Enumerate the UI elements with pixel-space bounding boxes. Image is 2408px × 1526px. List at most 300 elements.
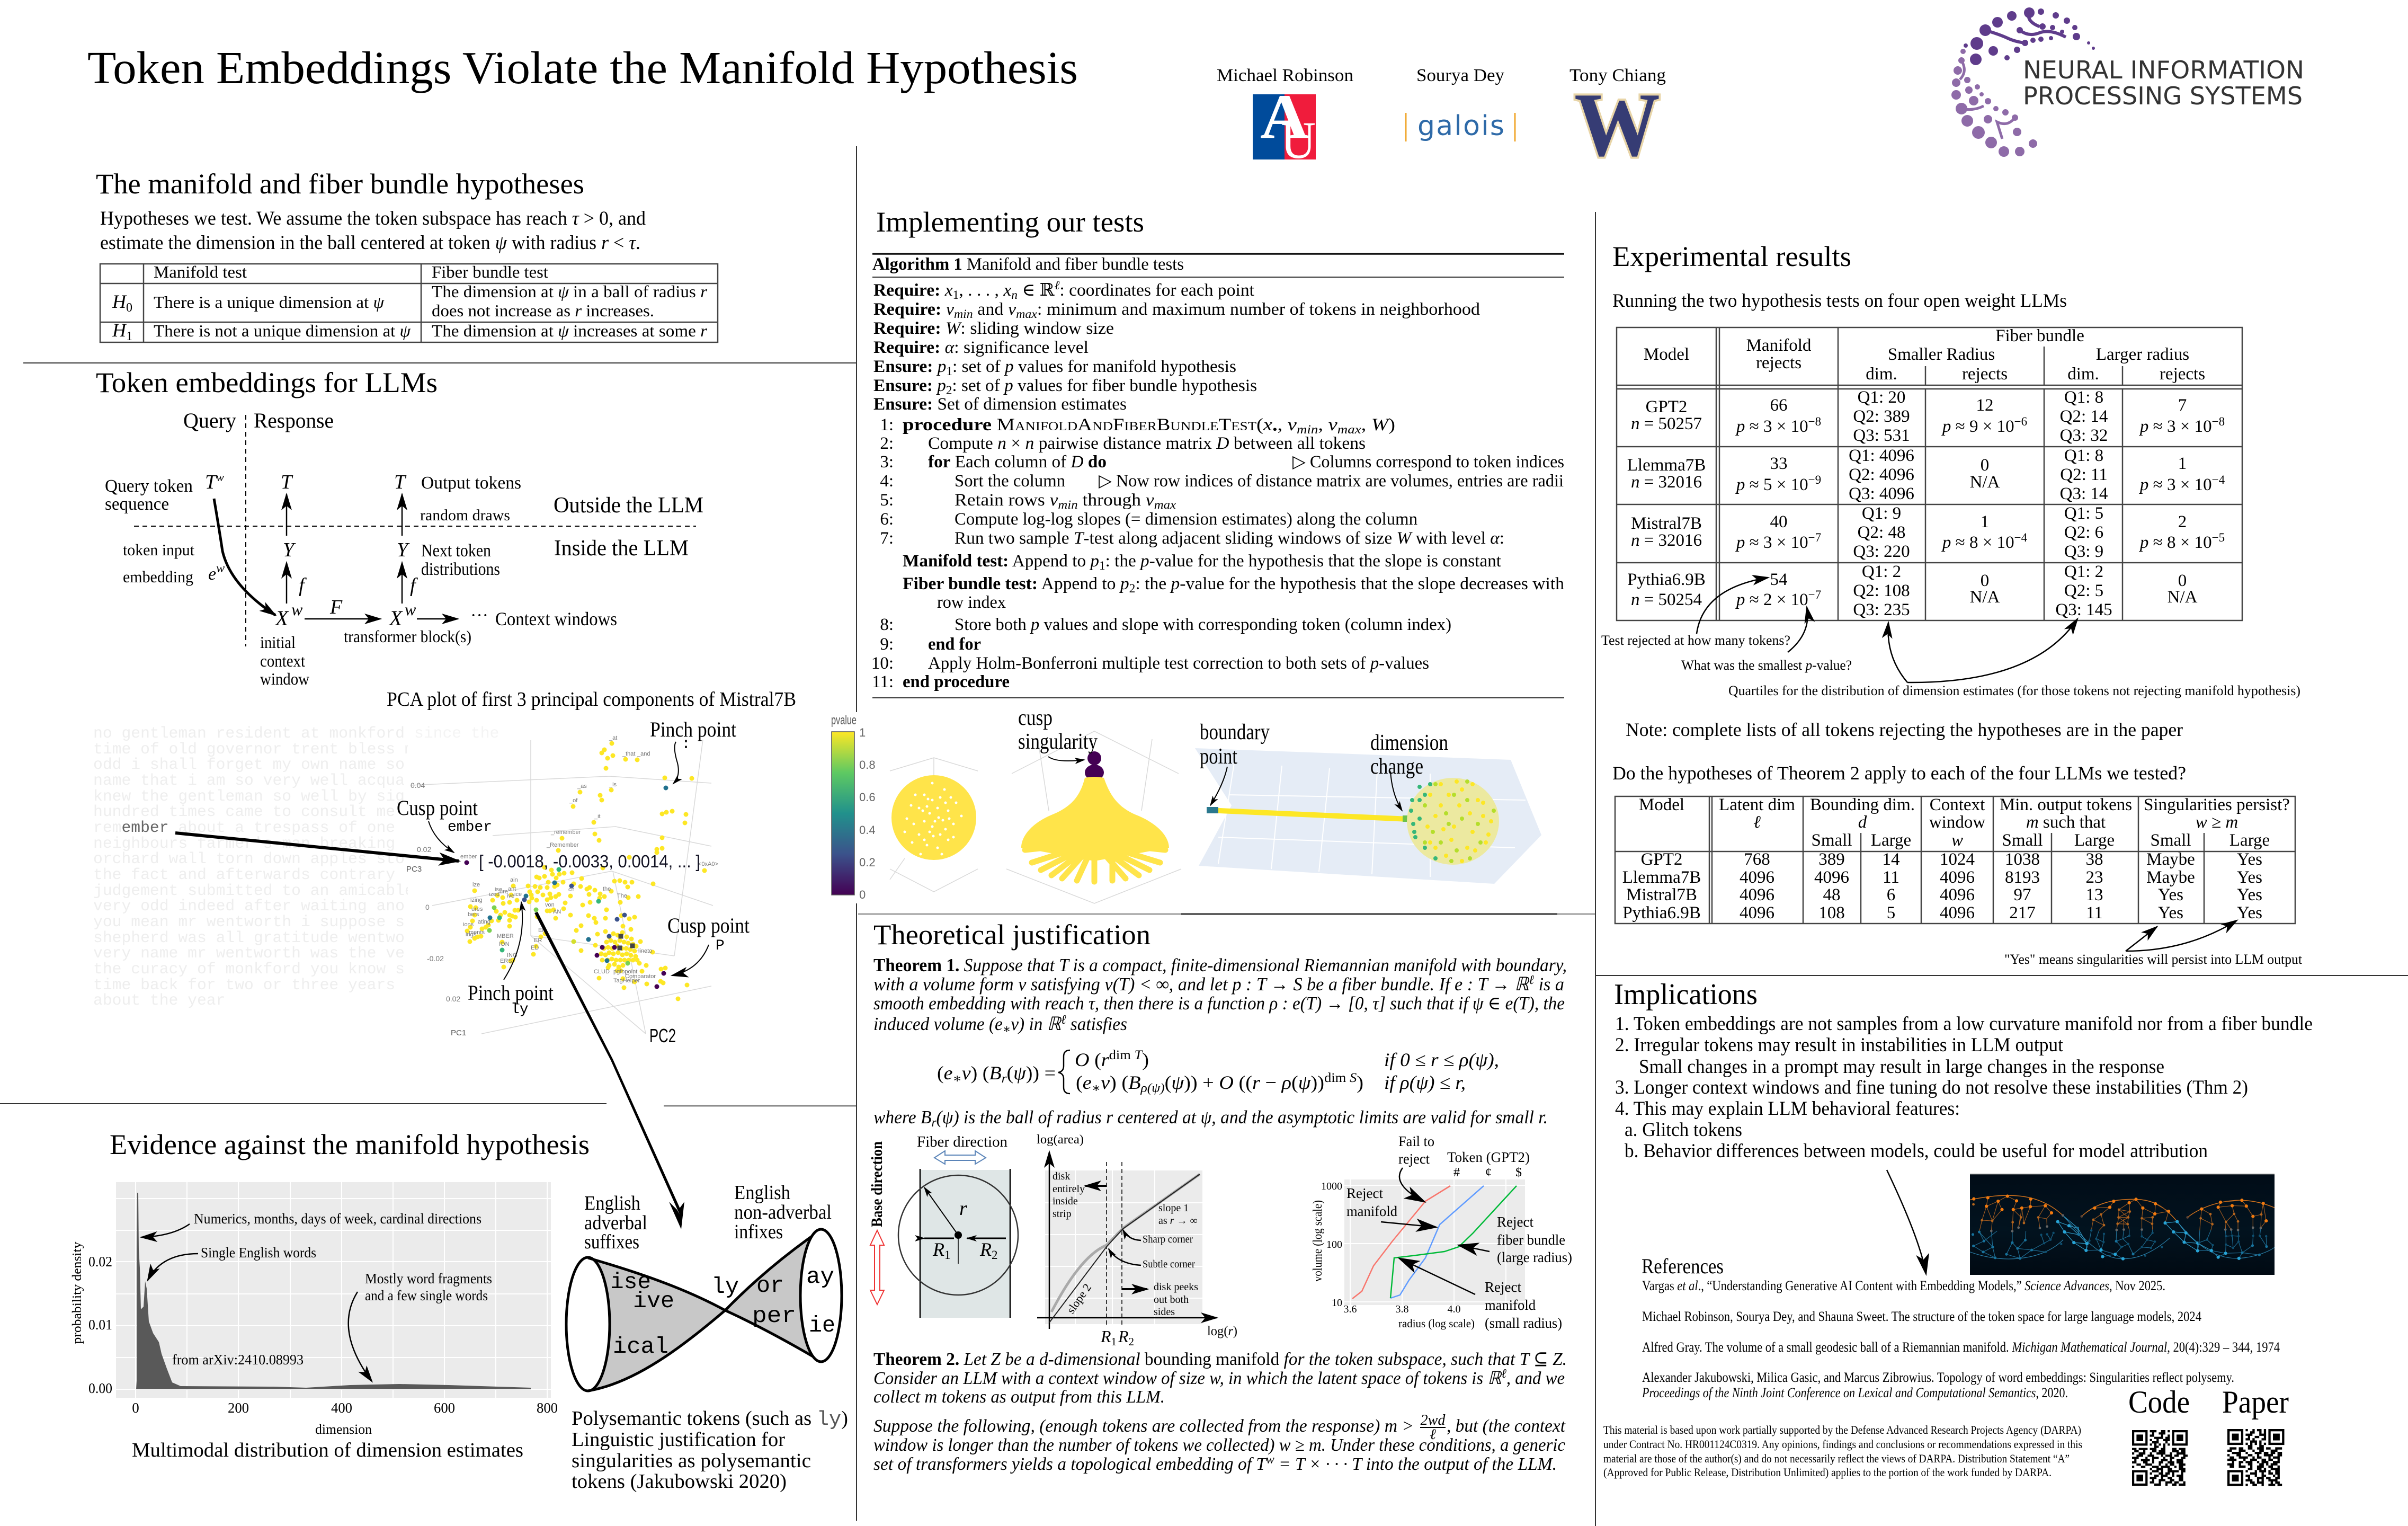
row GPT2: Q1: 8 [2064,388,2103,407]
row Pythia6.9B: 217 [2009,903,2036,922]
token labels on points: ice [514,891,522,898]
algorithm listing: : minimum and maximum number of tokens in neighborhood [1037,300,1481,319]
token labels on points: MBER [497,933,514,939]
polysemantic hourglass diagram: ive [633,1288,674,1314]
row Mistral7B: −7 [1808,531,1821,544]
figure: log area vs log r: log(r) [1207,1324,1237,1338]
equation: ( [1165,1072,1171,1093]
panel: evidence against the manifold hypothesis [70,1129,848,1493]
table annotations [1601,578,2300,698]
singularities table [1615,795,2295,924]
figure: strip and disk: Fiber direction [917,1133,1007,1150]
algorithm listing: n [1011,288,1018,301]
row GPT2: Q2: 389 [1853,407,1910,426]
QR code: paper [2227,1430,2283,1485]
PC2 axis label: PC2 [649,1025,676,1046]
figure: volume vs radius curves: manifold [1346,1203,1397,1219]
table note and arrows [2004,920,2303,967]
figure: strip and disk: R [933,1239,944,1260]
token labels on points: AN [553,909,561,915]
algorithm listing: ℓ [1055,279,1060,292]
implications list: 4. This may explain LLM behavioral features: [1615,1098,1960,1120]
row GPT2: Q2: 14 [2060,407,2108,426]
token labels: w [405,600,416,619]
theorem 1: induced volume (e [873,1014,1010,1034]
colour bar: 0.8 [859,758,876,771]
row Llemma7B: Yes [2237,868,2262,887]
row Mistral7B [1631,504,2225,561]
algorithm listing: Apply Holm-Bonferroni multiple test correction to both sets of p-values [928,654,1429,673]
algorithm rules [872,253,1564,255]
token labels: token input [123,540,194,559]
theorem 2: w [1266,1453,1274,1467]
figure: log area vs log r: Sharp corner [1143,1234,1193,1245]
hourglass labels: suffixes [584,1231,639,1253]
table annotations: Quartiles for the distribution of dimension estimates (for those tokens not rejecting manifold hypothesis) [1728,683,2300,698]
QR labels: Code [2128,1385,2190,1419]
panel: implications [1603,978,2313,1485]
row Pythia6.9B [1627,562,2198,619]
arrow: ember token to point [175,833,459,861]
algorithm listing: 4: [880,472,894,491]
token labels on points: TagHelper [613,978,640,984]
polysemantic hourglass diagram: ical [613,1334,668,1360]
faded background text passage: hundred times came to consult me [93,803,395,821]
token labels on points: _that [622,751,635,757]
axis tick labels: 0 [425,903,430,911]
row Mistral7B: p ≈ 8 × 10 [2140,533,2212,552]
references: Proceedings of the Ninth Joint Conference on Lexical and Computational Semantics, 2020. [1642,1385,2068,1400]
singularities table: d [1858,813,1867,832]
singularities table: Bounding dim. [1810,795,1915,814]
singularities table: w [1951,831,1963,850]
density histogram [70,1182,558,1437]
algorithm listing: through [1078,491,1146,510]
QR code: code [2132,1431,2188,1485]
algorithm listing: , . . . , [959,281,1003,300]
logo: American University [1253,81,1316,170]
polysemantic tokens caption: singularities as polysemantic [572,1450,811,1472]
token labels [105,471,703,688]
polysemantic hourglass diagram: ay [806,1264,834,1290]
equation: ψ)) + O ((r − ρ(ψ)) [1171,1072,1323,1093]
figure: volume vs radius curves: manifold [1485,1297,1536,1313]
long arrow: pinch point to polysemantic hourglass [534,912,684,1229]
figure: log area vs log r: inside [1053,1195,1078,1207]
singularities table: Small [2002,831,2043,850]
row Mistral7B: −4 [2014,531,2028,544]
figure: volume vs radius curves [1311,1133,1572,1331]
row Pythia6.9B: 5 [1887,903,1895,922]
equation: ) (B [971,1062,1001,1084]
row Pythia6.9B: Q1: 2 [1862,562,1901,581]
row GPT2 [1641,850,2262,869]
row GPT2: 389 [1818,850,1845,869]
table annotations: What was the smallest p-value? [1681,658,1852,673]
row GPT2: 1038 [2005,850,2040,869]
hypotheses table: There is a unique dimension at ψ [154,292,385,312]
row Llemma7B: Q3: 14 [2060,484,2108,503]
row Pythia6.9B: 11 [2086,903,2103,922]
axis tick labels: PC3 [406,865,422,874]
theorem 1: smooth embedding with reach τ, then there is a function ρ : e(T) → [0, τ] such that if ψ ∈ e(T), the [873,993,1565,1014]
note: Note: complete lists of all tokens rejecting the hypotheses are in the paper [1626,719,2183,740]
annotation: Cusp point P: Cusp point [667,913,750,937]
hypotheses table: does not increase as r increases. [432,301,654,320]
row Mistral7B: 13 [2086,885,2103,904]
token labels: f [299,574,307,597]
algorithm listing: x [1003,281,1018,301]
row Mistral7B: p ≈ 3 × 10 [1736,533,1808,552]
equation: ∗ [1092,1081,1101,1095]
token labels: context [260,651,305,670]
row Llemma7B: Q2: 4096 [1849,465,1914,484]
hypotheses table: The dimension at ψ increases at some r [432,321,708,340]
row Llemma7B: p ≈ 5 × 10 [1736,475,1808,494]
algorithm listing: 2 [1129,582,1135,595]
algorithm listing: , [1278,415,1288,434]
algorithm listing: max [1154,498,1176,511]
polysemantic hourglass diagram: ly [711,1274,739,1300]
row GPT2: 768 [1744,850,1770,869]
acknowledgement: under Contract No. HR001124C0319. Any opinions, findings and conclusions or recommendations expressed in this [1603,1438,2082,1451]
annotation: Pinch point ly [468,902,554,1018]
hourglass labels [584,1182,832,1253]
annotation: Cusp point P: P [716,938,725,954]
equation: O (r [1075,1049,1109,1070]
arrow to image [1887,1170,1926,1274]
author: Tony Chiang: Tony Chiang [1569,66,1666,85]
theorem 2 [873,1350,1567,1474]
faded background text passage [93,724,414,1009]
hourglass labels: English [734,1182,790,1204]
annotations: Mostly word fragments [365,1271,492,1287]
faded background text passage: no gentleman resident at monkford [93,724,405,742]
figure: volume vs radius curves: 4.0 [1447,1303,1461,1315]
equation: if 0 ≤ r ≤ ρ(ψ), [1384,1049,1499,1070]
token labels: T [394,471,407,493]
row GPT2: 66 [1770,396,1787,415]
row GPT2: 7 [2178,396,2187,415]
token labels: f [410,574,418,597]
acknowledgement: This material is based upon work partially supported by the Defense Advanced Research Projects Agency (DARPA) [1603,1423,2081,1436]
plot title: PCA plot of first 3 principal components of Mistral7B [387,688,796,711]
row Mistral7B [1626,885,2262,904]
algorithm listing: 7: [880,529,894,548]
theorem 2: window is longer than the number of tokens we collected) w ≥ m. Under these conditions, a generic [873,1435,1565,1455]
query and response labels [183,409,334,432]
row Mistral7B: −5 [2212,531,2225,544]
heading: Implications [1614,978,1758,1011]
singularities table: window [1929,813,1985,832]
algorithm listing: 1: [880,415,894,434]
implications list: Small changes in a prompt may result in large changes in the response [1639,1056,2164,1078]
algorithm listing: ▷ Now row indices of distance matrix are volumes, entries are radii [1099,472,1564,491]
illustration: boundary point and dimension change [1195,720,1541,884]
colour bar [831,713,876,901]
row Llemma7B: Maybe [2146,868,2195,887]
query and response labels: Query [183,409,236,432]
row Pythia6.9B: −7 [1808,588,1821,601]
algorithm listing: : set of [952,357,1005,376]
row Llemma7B: −9 [1808,473,1821,486]
token labels: random draws [420,507,510,524]
algorithm listing: ▷ Columns correspond to token indices [1292,453,1564,472]
faded background text passage: shepherd was all gratitude wentwo [93,929,405,947]
algorithm listing: end procedure [903,672,1010,691]
equation: ∗ [953,1072,962,1086]
row Mistral7B: Q2: 48 [1858,523,1905,542]
title: Token Embeddings Violate the Manifold Hypothesis [87,42,1078,93]
x axis title: dimension [315,1422,372,1437]
faded background text passage: odd i shall forget my own name so [93,756,405,774]
algorithm listing: 11: [872,672,894,691]
token labels: w [291,600,303,619]
figure: log area vs log r: Subtle corner [1143,1258,1195,1270]
token labels on points: izing [470,897,483,903]
row GPT2: 14 [1883,850,1899,869]
algorithm listing: Fiber bundle test: Append to p [903,574,1129,593]
token labels on points: ch [568,886,575,893]
dashed dividers [134,415,696,646]
figure: volume vs radius curves: 1000 [1321,1181,1342,1192]
colour bar: 1 [859,726,866,739]
token labels on points: CLUD [594,969,610,975]
figure: volume vs radius curves: # [1453,1166,1460,1179]
3D grid [411,740,713,1034]
heading: Experimental results [1612,241,1851,272]
x axis labels: 0 [132,1400,139,1416]
token labels: X [274,606,289,630]
row Mistral7B: n = 32016 [1631,531,1702,550]
algorithm listing: min [954,307,973,321]
token labels: ··· [470,606,488,625]
hourglass labels: infixes [734,1221,783,1243]
annotation: Cusp point ember [397,796,492,860]
algorithm listing: 8: [880,615,894,634]
singularities table: Min. output tokens [2000,795,2132,814]
singularities table: ℓ [1753,813,1761,832]
token labels on points: ise [495,886,502,893]
where clause: (ψ) is the ball of radius r centered at ψ, and the asymptotic limits are valid for small r. [936,1107,1548,1128]
token labels on points: ION [499,941,510,947]
table note and arrows: "Yes" means singularities will persist into LLM output [2004,952,2303,967]
token labels: Inside the LLM [554,536,689,561]
acknowledgement [1603,1423,2082,1479]
arrows between tokens and context windows [214,494,458,619]
figure: volume vs radius curves: Reject [1346,1185,1383,1201]
where clause: r [932,1116,937,1130]
x axis labels: 800 [537,1400,558,1416]
theorem 1: is a [1534,974,1564,995]
intro text: estimate the dimension in the ball centered at token ψ with radius r < τ. [100,232,640,254]
annotation: Cusp point ember: ember [448,819,492,836]
row Pythia6.9B: Pythia6.9B [1627,570,1706,589]
algorithm listing: p-value for the hypothesis that the slope is constant [1140,552,1499,571]
results table: dim. [1866,365,1897,384]
theorem 2: = T × · · · T into the output of the LLM. [1274,1454,1557,1474]
illustration: cusp singularity: singularity [1018,730,1098,754]
row Mistral7B: Mistral7B [1631,514,1702,533]
algorithm listing: max [1337,423,1362,436]
row Pythia6.9B: Q2: 108 [1853,581,1910,600]
references: References [1642,1254,1724,1278]
annotation: Pinch point ly: ly [511,1001,529,1018]
faded background text passage: remember about a trespass of one [93,819,395,837]
query and response labels: Response [254,409,334,432]
algorithm listing: : set of [952,376,1004,395]
row GPT2: p ≈ 3 × 10 [2140,417,2212,436]
polysemantic hourglass diagram: per [752,1303,796,1329]
figure: volume vs radius curves: Reject [1497,1214,1533,1230]
row Mistral7B: Q3: 220 [1853,542,1910,561]
row Pythia6.9B: Q2: 5 [2064,581,2103,600]
row Mistral7B: Mistral7B [1626,885,1697,904]
equation: ρ(ψ) [1140,1081,1165,1095]
token labels: w [216,471,224,484]
token labels on points: ant [508,886,516,892]
faded background text passage: name that i am so very well acqua [93,771,405,789]
polysemantic tokens caption: tokens (Jakubowski 2020) [572,1470,787,1493]
algorithm caption: Algorithm 1 Manifold and fiber bundle tests [872,255,1184,274]
annotation: Pinch point top: : [681,735,691,753]
token labels on points: the [603,886,611,892]
row Llemma7B: Q2: 11 [2060,465,2108,484]
algorithm listing: row index [937,593,1006,612]
theorem 1: Theorem 1. Suppose that T is a compact, finite-dimensional Riemannian manifold with boundary, [873,955,1567,975]
row Llemma7B: Q1: 8 [2064,446,2103,465]
logo: American University: A [1260,81,1309,152]
annotations [141,1211,492,1381]
equation: dim T [1109,1048,1141,1062]
token labels on points: ED [531,945,539,951]
algorithm listing: W) [1371,415,1394,434]
equation: if ρ(ψ) ≤ r, [1384,1072,1466,1093]
row GPT2: Q1: 20 [1858,388,1905,407]
token labels: T [281,471,293,493]
algorithm listing: Store both p values and slope with corresponding token (column index) [955,615,1451,634]
token labels on points: ures [471,906,483,912]
row Llemma7B: 1 [2178,454,2187,473]
figure: strip and disk: 1 [944,1248,950,1262]
results table: dim. [2067,365,2099,384]
algorithm listing: : coordinates for each point [1059,281,1254,300]
author: Sourya Dey: Sourya Dey [1416,66,1504,85]
theorem 2: Suppose the following, (enough tokens are collected from the response) m > [873,1416,1414,1436]
colour bar: 0.6 [859,791,876,804]
row GPT2: Yes [2237,850,2262,869]
algorithm listing: Require: x [873,281,952,300]
axis tick labels: PC1 [451,1028,466,1037]
annotation: Cusp point ember: Cusp point [397,796,478,820]
figure: log area vs log r [1037,1133,1237,1348]
theorem 2: ℓ [1430,1426,1436,1443]
algorithm listing: • [1272,423,1278,436]
illustration: cusp singularity [1006,706,1181,903]
algorithm listing: Manifold test: Append to p [903,552,1099,571]
row Mistral7B: 48 [1823,885,1840,904]
y axis labels: 0.01 [88,1317,112,1333]
panel: PCA plot of Mistral7B [93,688,876,1046]
token labels on points: ize [472,882,480,888]
figure: volume vs radius curves: 100 [1326,1239,1342,1250]
colour bar: pvalue [831,713,857,727]
theorem 2: set of transformers yields a topological embedding of T [873,1454,1273,1474]
polysemantic hourglass diagram: ise [610,1269,651,1295]
panel: experimental results [1601,241,2303,967]
token labels: T [205,471,216,493]
algorithm listing: 5: [880,491,894,510]
hourglass labels: English [584,1192,640,1214]
algorithm listing: v [1328,415,1362,436]
theorem 2: ℓ [1501,1367,1506,1381]
figure: strip and disk: 2 [992,1248,998,1262]
panel: manifold and fiber bundle hypotheses [96,168,718,343]
annotations: from arXiv:2410.08993 [172,1352,304,1368]
figure: volume vs radius curves: radius (log scale) [1398,1317,1475,1330]
row Llemma7B: 4096 [1940,868,1975,887]
acknowledgement: material are those of the author(s) and do not necessarily reflect the views of DARPA. Distribution Statement “A” [1603,1452,2070,1465]
algorithm listing: ∈ ℝ [1018,281,1055,300]
faded background text passage: knew the gentleman so well by sig [93,787,405,805]
singularities table: Small [1811,831,1852,850]
row GPT2: Q3: 32 [2060,426,2108,445]
axis tick labels: 0.04 [411,781,425,789]
annotations: Single English words [201,1245,316,1261]
token labels: embedding [123,567,193,586]
algorithm listing: 10: [871,654,894,673]
equation [937,1048,1499,1095]
row Llemma7B: n = 32016 [1631,473,1702,492]
row GPT2: −6 [2014,415,2027,428]
theorem 2: collect m tokens as output from this LLM. [873,1387,1165,1407]
colour bar: 0.4 [859,823,876,837]
equation: ) [1357,1072,1363,1093]
theorem 2: 2wd [1421,1412,1446,1429]
row GPT2: Q3: 531 [1853,426,1910,445]
token labels on points: bers [468,911,479,918]
singularities table: Small [2150,831,2191,850]
equation: dim S [1324,1071,1356,1085]
row GPT2: Maybe [2146,850,2195,869]
row Llemma7B: N/A [1970,473,2000,492]
heading: The manifold and fiber bundle hypotheses [96,168,584,200]
row Llemma7B: 23 [2086,868,2103,887]
question: Do the hypotheses of Theorem 2 apply to each of the four LLMs we tested? [1612,762,2186,784]
x axis labels: 600 [434,1400,455,1416]
axis tick labels: 0.02 [417,845,431,854]
polysemantic tokens caption [572,1407,848,1493]
theorem 2: , but (the context [1447,1416,1566,1436]
figure: volume vs radius curves: fiber bundle [1497,1232,1565,1248]
row Pythia6.9B: Pythia6.9B [1622,903,1701,922]
colour bar: 0.2 [859,856,876,869]
algorithm listing: Compute n × n pairwise distance matrix D between all tokens [928,434,1366,453]
row Mistral7B: 1 [1981,512,1989,531]
algorithm listing: Require: W: sliding window size [873,319,1114,338]
row GPT2: GPT2 [1641,850,1682,869]
where clause: where B [873,1107,934,1128]
token labels: w [216,562,225,575]
row Mistral7B: 97 [2014,885,2031,904]
heading: Theoretical justification [873,919,1151,951]
row Llemma7B: Llemma7B [1622,868,1701,887]
figure: volume vs radius curves: ¢ [1485,1166,1492,1179]
token labels: Output tokens [421,473,521,493]
row Llemma7B: 4096 [1814,868,1849,887]
row Pythia6.9B: N/A [2168,588,2198,607]
token labels on points: _and [637,751,650,757]
